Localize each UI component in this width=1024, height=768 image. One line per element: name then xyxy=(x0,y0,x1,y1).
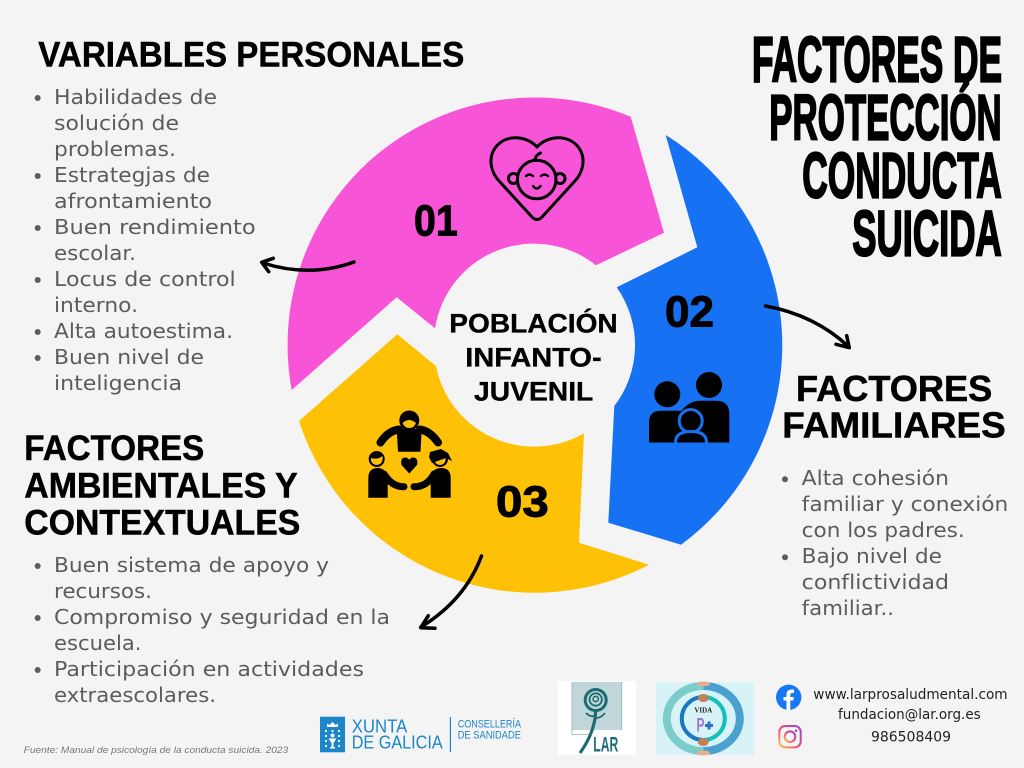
list: variables personales: inteligencia xyxy=(54,371,182,395)
logo: Xunta de Galicia: DE SANIDADE xyxy=(458,729,521,741)
number 01: 01 xyxy=(414,196,458,245)
logo: Vida P+: VIDA xyxy=(694,707,712,715)
list: factores familiares: familiar y conexión xyxy=(802,492,1008,516)
logo: LAR: LAR xyxy=(593,734,618,757)
list: factores ambientales: Participación en actividades xyxy=(54,657,364,681)
arrow: blue to family factors xyxy=(766,306,849,348)
center label: INFANTO- xyxy=(465,343,602,373)
contact details: 986508409 xyxy=(871,730,951,746)
list: variables personales: interno. xyxy=(54,293,138,317)
center label: POBLACIÓN xyxy=(449,308,618,339)
heading: factores ambientales y contextuales: CONTEXTUALES xyxy=(24,503,300,542)
list: variables personales: problemas. xyxy=(54,137,176,161)
icon: baby in heart xyxy=(491,138,583,220)
heading: factores familiares xyxy=(782,368,1006,446)
number 02: 02 xyxy=(665,288,714,337)
list: factores familiares: familiar.. xyxy=(802,596,894,620)
source note: Fuente: Manual de psicología de la conducta suicida. 2023 xyxy=(24,745,289,756)
heading: factores ambientales y contextuales: FACTORES xyxy=(24,429,204,468)
heading: variables personales: VARIABLES PERSONALES xyxy=(38,36,464,75)
list: variables personales: Estrategjas de xyxy=(54,163,210,187)
list: variables personales: afrontamiento xyxy=(54,189,212,213)
center label: JUVENIL xyxy=(474,377,593,407)
list: variables personales xyxy=(35,85,256,395)
list: variables personales: Buen rendimiento xyxy=(54,215,256,239)
logo: LAR xyxy=(558,681,636,757)
logo: Xunta de Galicia: CONSELLERÍA xyxy=(458,718,522,731)
contact details: fundacion@lar.org.es xyxy=(838,707,981,723)
list: factores familiares xyxy=(782,466,1008,620)
list: factores ambientales: Buen sistema de apoyo y xyxy=(54,553,329,577)
cycle diagram xyxy=(288,97,782,593)
list: variables personales: Alta autoestima. xyxy=(54,319,233,343)
list: variables personales: Habilidades de xyxy=(54,85,217,109)
list: variables personales: Locus de control xyxy=(54,267,236,291)
contact details: www.larprosaludmental.com xyxy=(813,687,1008,703)
list: factores ambientales: recursos. xyxy=(54,579,152,603)
logo: Xunta de Galicia xyxy=(320,716,522,753)
list: factores familiares: Alta cohesión xyxy=(802,466,949,490)
list: factores ambientales: extraescolares. xyxy=(54,683,216,707)
list: factores familiares: con los padres. xyxy=(802,518,965,542)
logo: Xunta de Galicia: XUNTA xyxy=(352,716,407,736)
segment 02 blue xyxy=(608,135,782,545)
segment 01 pink xyxy=(288,97,664,390)
list: factores familiares: conflictividad xyxy=(802,570,949,594)
list: variables personales: escolar. xyxy=(54,241,136,265)
heading: factores familiares: FACTORES xyxy=(796,368,992,409)
title xyxy=(752,24,1002,270)
logo: Xunta de Galicia: DE GALICIA xyxy=(352,733,443,753)
icon: community group xyxy=(368,410,452,498)
icon: facebook xyxy=(776,685,801,710)
list: factores ambientales: escuela. xyxy=(54,631,142,655)
icon: family xyxy=(649,372,729,442)
list: variables personales: solución de xyxy=(54,111,179,135)
list: variables personales: Buen nivel de xyxy=(54,345,204,369)
heading: factores familiares: FAMILIARES xyxy=(782,405,1006,446)
icon: instagram xyxy=(779,726,801,747)
arrow: pink to personal variables xyxy=(262,258,354,272)
number 03: 03 xyxy=(496,478,549,527)
contact details xyxy=(813,687,1008,746)
segment 03 yellow xyxy=(299,334,649,593)
list: factores ambientales xyxy=(35,553,390,707)
heading: factores ambientales y contextuales xyxy=(24,429,300,542)
list: factores ambientales: Compromiso y seguridad en la xyxy=(54,605,390,629)
list: factores familiares: Bajo nivel de xyxy=(802,544,942,568)
heading: factores ambientales y contextuales: AMBIENTALES Y xyxy=(24,466,298,505)
center label xyxy=(449,308,618,407)
arrow: yellow to environmental factors xyxy=(421,556,482,628)
logo: Vida P+: P xyxy=(696,716,705,736)
logo: Vida P+ xyxy=(656,682,754,756)
